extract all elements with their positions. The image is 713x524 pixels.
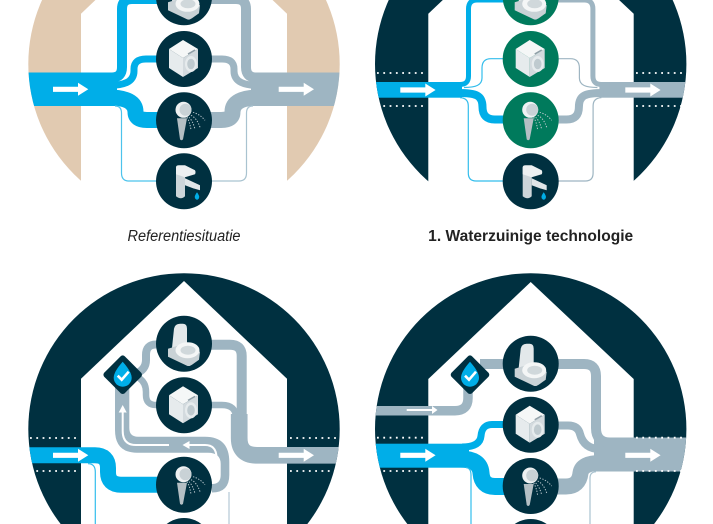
icon: toilet [156,316,212,372]
house and circle backdrop [375,0,686,240]
label: referentiesituatie: Referentiesituatie [128,228,241,245]
arrow out [625,449,661,462]
dotted edge of outgoing band [636,438,685,471]
icon: washing machine [156,377,212,433]
house and circle backdrop [28,273,340,524]
house and circle backdrop [28,0,340,240]
arrows in reuse loop [119,405,216,457]
arrow: rainwater [407,406,438,414]
incoming water pipes [20,0,160,181]
arrow out [625,84,661,96]
arrow in [53,83,88,96]
icon: shower [156,92,212,148]
icon: washing machine [503,31,559,87]
label: waterzuinige technologie: 1. Waterzuinige technologie [428,228,634,245]
dotted pipe outline [377,73,685,106]
outgoing water pipes [208,0,348,181]
rainwater pipe [370,385,468,411]
icon: tap [503,519,559,524]
icon: washing machine [156,31,212,87]
arrow out [279,83,314,96]
shower water supply [20,455,160,485]
dotted pipe outline [377,438,425,471]
icon: toilet [503,0,559,25]
outgoing water pipes [556,0,691,181]
arrow out [279,449,314,462]
icon: toilet [156,0,212,25]
icon: washing machine [503,397,559,453]
tap supply lines [88,464,229,524]
panel: waterzuinige technologie [370,0,691,245]
icon: shower [503,92,559,148]
icon: toilet [503,336,559,392]
house and circle backdrop [375,273,686,524]
panel: hergebruik regenwater [370,273,694,524]
icon: shower [156,457,212,513]
panel: referentiesituatie [20,0,348,245]
panel: hergebruik douchewater [20,273,345,524]
icon: tap [156,153,212,209]
icon: tap [156,518,212,524]
arrow in [53,449,88,462]
arrow in [400,449,436,462]
grey water reuse loop [115,344,345,492]
icon: water quality diamond [102,354,143,395]
icon: shower [503,458,559,514]
incoming water pipes [370,424,505,524]
dotted pipe outline [30,438,338,471]
outgoing water pipes [480,364,694,524]
icon: water quality diamond [449,354,491,395]
incoming water pipes [370,0,505,181]
icon: tap [503,153,559,209]
arrow in [400,84,436,96]
